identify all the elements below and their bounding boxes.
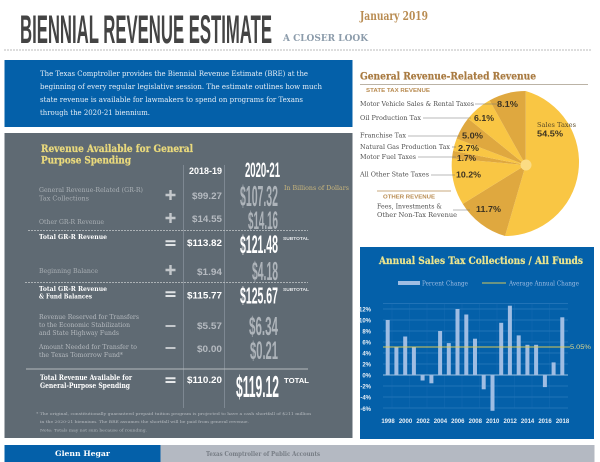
row: beginning balance: $1.94 [197, 267, 223, 278]
pie chart [452, 91, 579, 236]
date: January 2019 [359, 9, 428, 23]
pie labels: 8.1% [497, 99, 518, 109]
average value label: 5.05% [570, 344, 591, 351]
row: revenue reserved for transfers [39, 311, 278, 341]
pie labels: Motor Vehicle Sales & Rental Taxes [360, 100, 474, 108]
row: total GR-R revenue: $113.82 [187, 238, 222, 249]
bar chart [359, 303, 591, 425]
pie labels: Sales Taxes [537, 121, 576, 129]
bar chart: 2000 [399, 419, 413, 425]
row: revenue reserved for transfers: Revenue Reserved for Transfers [39, 313, 139, 321]
panel: revenue available for general purpose spending: $14.16 [248, 207, 278, 235]
pie labels: 10.2% [456, 170, 481, 180]
pie labels: Oil Production Tax [360, 114, 421, 122]
bar chart: 10% [359, 318, 372, 324]
panel: revenue available for general purpose spending: $107.32 [240, 181, 278, 213]
row: total GR-R revenue and fund balances: $115.77 [187, 290, 222, 302]
row: revenue reserved for transfers: and State Highway Funds [39, 329, 119, 337]
footer: Glenn Hegar [55, 449, 110, 458]
bar chart: -4% [360, 396, 372, 402]
intro text [40, 69, 322, 117]
row: total GR-R revenue [39, 231, 309, 259]
row: total GR-R revenue: $121.48 [240, 231, 278, 259]
pie labels: All Other State Taxes [359, 170, 429, 178]
row: total GR-R revenue and fund balances: & Fund Balances [39, 292, 92, 300]
row: other GR-R revenue [39, 207, 278, 235]
panel heading [41, 143, 193, 166]
row: transfer to Texas Tomorrow Fund: $0.00 [197, 344, 222, 355]
intro text: The Texas Comptroller provides the Biennial Revenue Estimate (BRE) at the [40, 69, 308, 78]
intro text: beginning of every regular legislative session. The estimate outlines how much [40, 82, 322, 91]
pie labels: 2.7% [458, 143, 479, 153]
bar chart: 1998 [381, 419, 395, 425]
row: other GR-R revenue: Other GR-R Revenue [39, 218, 104, 226]
footnote: in the 2020-21 biennium. The BRE assumes the shortfall will be paid from general revenue. [40, 419, 249, 424]
row: total GR-R revenue: SUBTOTAL [283, 236, 309, 241]
footnote: * The original, constitutionally guaranteed prepaid tuition program is projected to have a cash shortfall of $211 million [36, 411, 311, 416]
row: beginning balance [39, 256, 278, 286]
panel: revenue available for general purpose spending: $4.18 [252, 256, 278, 286]
pie labels: 11.7% [476, 204, 501, 214]
chart legend: Average Annual Change [508, 280, 579, 288]
bar chart: 2% [362, 362, 372, 368]
bar chart: 2014 [521, 419, 535, 425]
bar chart: 0% [362, 374, 372, 380]
row: total GR-R revenue and fund balances: $125.67 [240, 282, 278, 308]
row: transfer to Texas Tomorrow Fund: the Texas Tomorrow Fund* [39, 351, 124, 359]
bar chart: 2012 [504, 419, 518, 425]
bar chart: 4% [362, 352, 372, 358]
panel: annual sales tax collections [359, 247, 594, 439]
row: transfer to Texas Tomorrow Fund: Amount Needed for Transfer to [38, 343, 137, 351]
chart legend: Percent Change [422, 280, 468, 288]
row: total revenue available: TOTAL [284, 378, 310, 385]
row: total revenue available: $110.20 [187, 375, 222, 386]
panel: revenue available for general purpose spending [4, 133, 352, 438]
pie labels: 5.0% [462, 130, 483, 140]
row: total GR-R revenue and fund balances [39, 282, 309, 308]
bar chart: 2006 [451, 419, 465, 425]
row: total revenue available: $119.12 [236, 369, 279, 404]
bar chart: -6% [360, 407, 372, 413]
bar chart: 6% [362, 340, 372, 346]
chart legend [398, 280, 579, 288]
bar chart: 8% [362, 330, 372, 336]
row: total GR-R revenue and fund balances: Total GR-R Revenue [39, 285, 107, 293]
row: total revenue available [40, 369, 310, 404]
state tax revenue label: STATE TAX REVENUE [366, 88, 430, 94]
row: GR-R tax collections [39, 181, 278, 213]
bar chart: 2016 [538, 419, 552, 425]
pie labels: Franchise Tax [360, 132, 406, 140]
pie labels: 54.5% [537, 128, 563, 138]
footnote [36, 411, 311, 432]
subtitle: A CLOSER LOOK [282, 34, 369, 44]
pie section heading: General Revenue-Related Revenue [360, 72, 536, 82]
row: GR-R tax collections: Tax Collections [39, 194, 89, 202]
footnote: Note: Totals may not sum because of rounding. [40, 428, 147, 432]
bar chart: 2002 [416, 419, 430, 425]
row: total GR-R revenue and fund balances: SUBTOTAL [283, 287, 309, 292]
pie labels: 1.7% [457, 153, 476, 163]
other revenue label: OTHER REVENUE [383, 194, 435, 200]
row: revenue reserved for transfers: $5.57 [197, 321, 222, 332]
bar chart: 2010 [486, 419, 500, 425]
pie labels: 6.1% [474, 113, 494, 123]
footer [4, 445, 594, 462]
panel heading: Revenue Available for General [41, 143, 193, 155]
intro text: state revenue is available for lawmakers to spend on programs for Texans [40, 95, 303, 104]
panel: revenue available for general purpose spending: 2020-21 [245, 159, 280, 182]
row: total revenue available: General-Purpose Spending [40, 381, 130, 390]
chart title: Annual Sales Tax Collections / All Funds [378, 256, 583, 267]
row: beginning balance: Beginning Balance [39, 267, 98, 275]
pie labels: Fees, Investments & [377, 202, 442, 210]
row: total GR-R revenue: Total GR-R Revenue [39, 233, 107, 241]
row: revenue reserved for transfers: to the Economic Stabilization [39, 321, 130, 329]
panel: introduction [4, 60, 352, 127]
panel: revenue available for general purpose spending: $0.21 [250, 337, 278, 365]
bar chart: 12% [359, 308, 372, 314]
panel: revenue available for general purpose spending: $6.34 [249, 311, 278, 341]
row: total revenue available: Total Revenue Available for [40, 373, 132, 382]
pie labels: Natural Gas Production Tax [360, 143, 450, 151]
bar chart: -2% [360, 384, 372, 390]
row: GR-R tax collections: $99.27 [192, 191, 222, 202]
row: other GR-R revenue: $14.55 [192, 214, 223, 225]
pie labels: Other Non-Tax Revenue [377, 211, 457, 219]
row: transfer to Texas Tomorrow Fund [38, 337, 278, 365]
bar chart: 2018 [556, 419, 570, 425]
pie labels: Motor Fuel Taxes [360, 153, 416, 161]
column header 2018-19: 2018-19 [189, 166, 222, 176]
bar chart: 2004 [434, 419, 448, 425]
units note: In Billions of Dollars [284, 184, 349, 192]
panel heading: Purpose Spending [41, 154, 132, 166]
pie labels [359, 99, 576, 219]
bar chart: 2008 [469, 419, 483, 425]
footer: Texas Comptroller of Public Accounts [206, 451, 321, 458]
row: GR-R tax collections: General Revenue-Related (GR-R) [39, 186, 143, 194]
intro text: through the 2020-21 biennium. [40, 108, 150, 117]
